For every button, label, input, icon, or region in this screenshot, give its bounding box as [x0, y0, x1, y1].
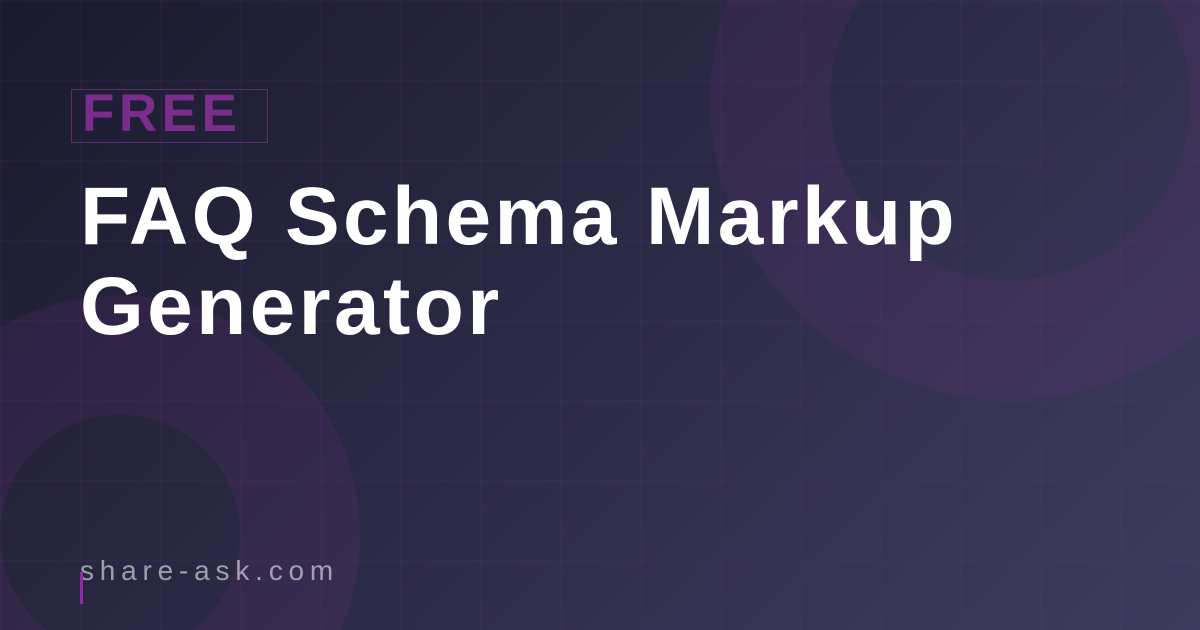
domain text: share-ask.com	[80, 555, 339, 586]
title: FAQ Schema Markup	[80, 171, 958, 262]
accent bar	[80, 572, 83, 604]
badge: FREE: FREE	[82, 84, 241, 143]
title: Generator	[80, 261, 503, 352]
title	[80, 171, 958, 352]
